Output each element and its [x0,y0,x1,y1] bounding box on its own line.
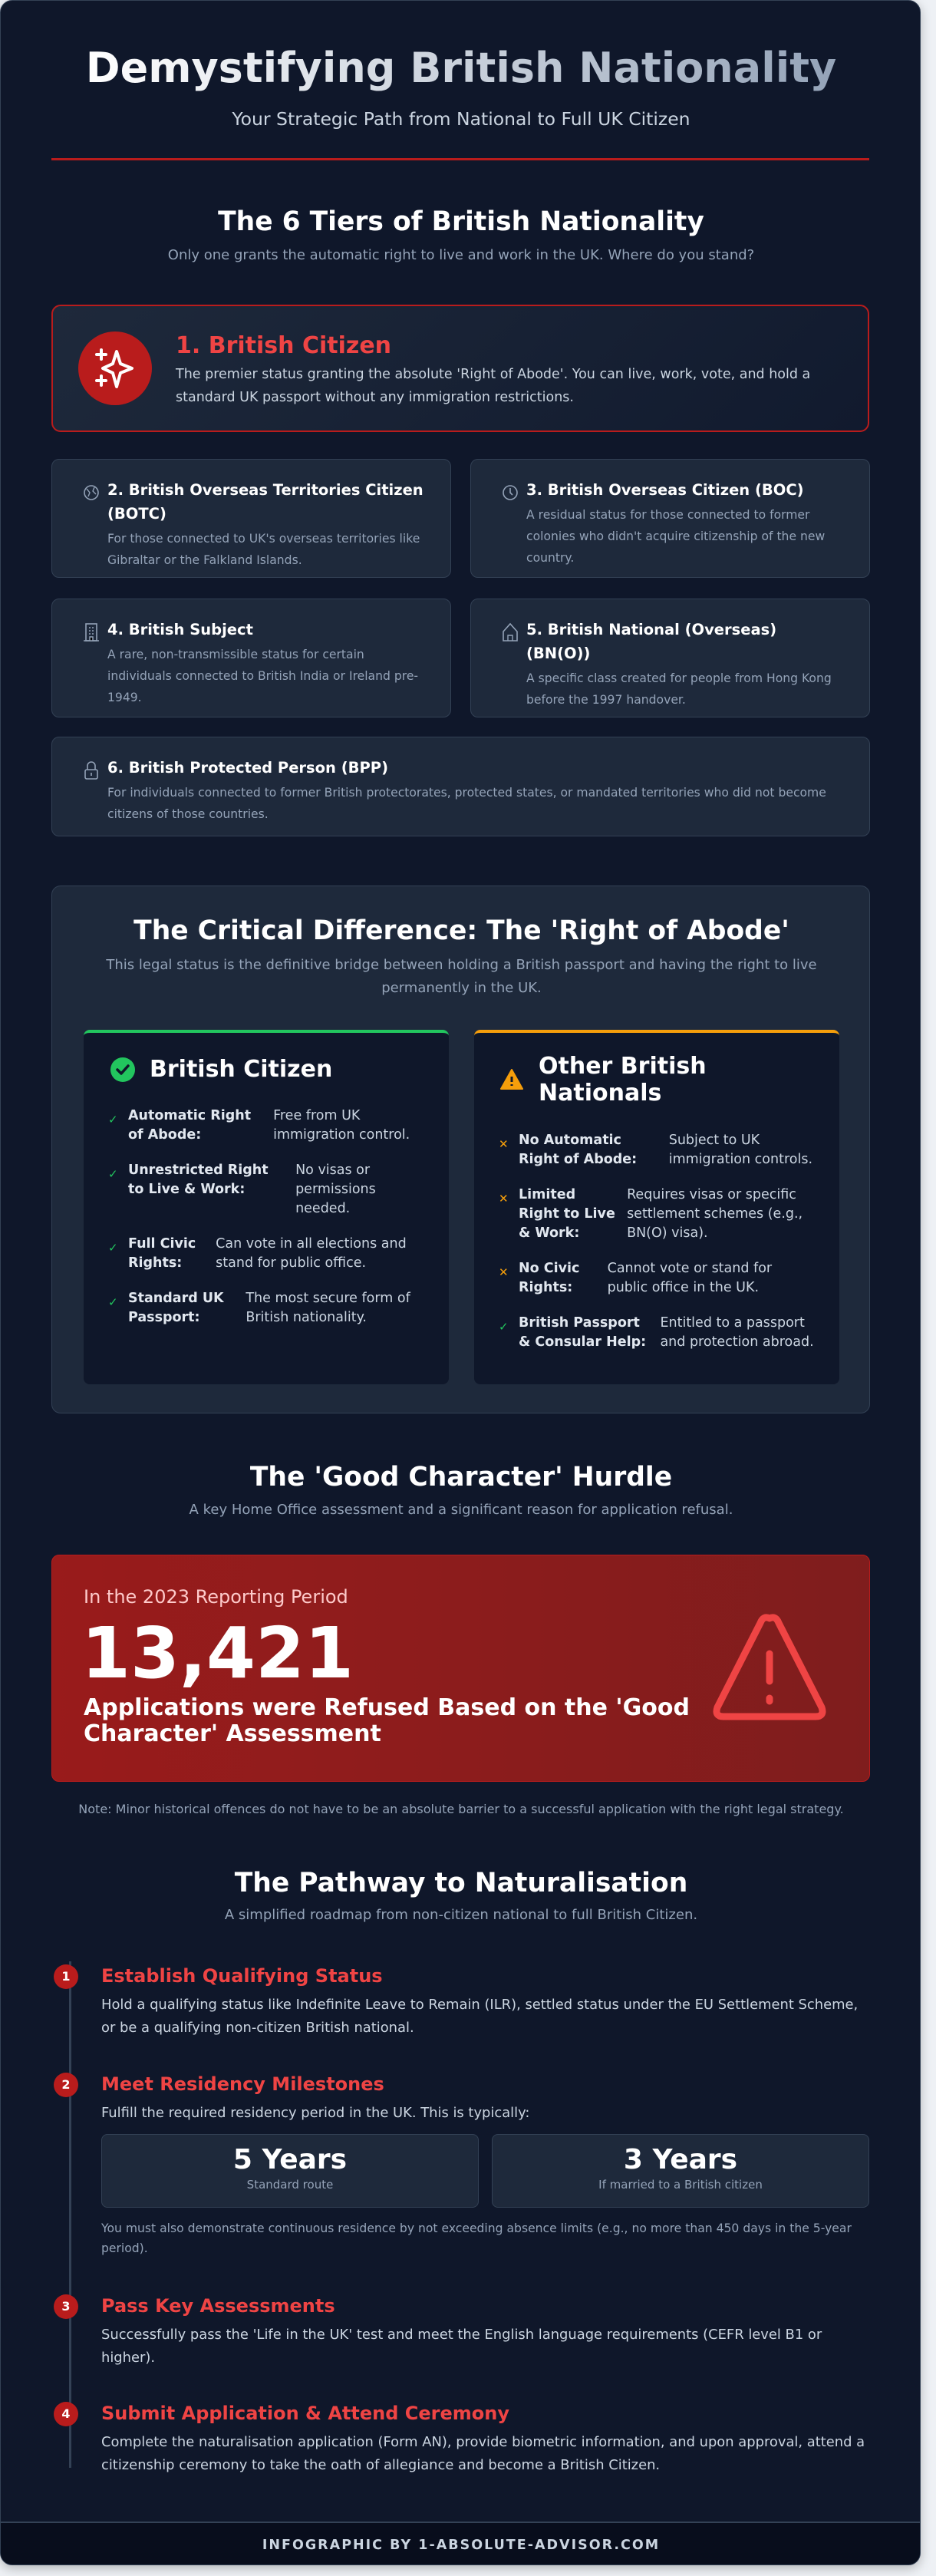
step 3: Pass Key Assessments [101,2295,335,2317]
section heading: pathway: The Pathway to Naturalisation [235,1868,687,1898]
box: 5 years: 5 Years [233,2144,347,2175]
icon: building [84,623,99,642]
step 1 [54,1964,858,2036]
step 3: Successfully pass the 'Life in the UK' test and meet the English language requirements (CEFR level B1 or higher). [101,2327,822,2366]
box: 3 years: If married to a British citizen [598,2178,763,2192]
list: citizen rights: ✓ [108,1241,118,1255]
panel: tier 6 BPP [51,737,870,836]
list: citizen rights: Full Civic Rights: [128,1236,196,1271]
header subtitle: Your Strategic Path from National to Full UK Citizen [232,108,690,130]
list: citizen rights: Automatic Right of Abode: [128,1108,251,1143]
list: citizen rights: No visas or permissions needed. [295,1163,376,1216]
list: citizen rights: ✓ [108,1167,118,1181]
heading with warning icon [500,1053,707,1107]
section heading: tiers: The 6 Tiers of British Nationality [218,206,704,237]
abode heading: The Critical Difference: The 'Right of Abode' [133,915,789,946]
panel: tier 4 British Subject [51,599,451,717]
section subtitle: good character: A key Home Office assessment and a significant reason for application refusal. [190,1502,733,1518]
list: other nationals rights [499,1133,814,1350]
list: other nationals rights: No Civic Rights: [519,1261,579,1295]
icon: house [503,623,518,642]
box: 3 years [492,2134,869,2208]
icon: clock [503,485,518,500]
icon: warning triangle [714,1614,826,1720]
list: citizen rights: The most secure form of British nationality. [246,1291,410,1325]
panel: right of abode [51,886,870,1413]
step 4: Submit Application & Attend Ceremony [101,2403,509,2424]
year boxes [101,2134,869,2208]
box: 5 years: Standard route [247,2178,333,2192]
abode subtitle: This legal status is the definitive bridge between holding a British passport and having the right to live permanently in the UK. [106,957,817,996]
list: other nationals rights: ✓ [499,1320,509,1334]
step 2: Fulfill the required residency period in the UK. This is typically: [101,2105,529,2121]
list: other nationals rights: Subject to UK immigration controls. [669,1133,812,1167]
step 2 [54,2073,869,2255]
footer: INFOGRAPHIC BY 1-ABSOLUTE-ADVISOR.COM [262,2538,660,2553]
panel: tier 6 BPP: 6. British Protected Person (BPP) [107,759,388,777]
step 4: Complete the naturalisation application (Form AN), provide biometric information, and upon approval, attend a citizenship ceremony to take the oath of allegiance and become a British Citizen. [101,2434,865,2473]
step 2: You must also demonstrate continuous residence by not exceeding absence limits (e.g., no more than 450 days in the 5-year period). [101,2221,852,2255]
panel: tier 3 BOC: 3. British Overseas Citizen (BOC) [526,481,804,499]
step 2: Meet Residency Milestones [101,2073,384,2095]
list: citizen rights: Free from UK immigration control. [273,1108,410,1143]
section subtitle: pathway: A simplified roadmap from non-citizen national to full British Citizen. [225,1907,697,1923]
panel: tier 2 BOTC: 2. British Overseas Territories Citizen (BOTC) [107,481,424,523]
callout: refusal statistic [51,1555,870,1782]
timeline: 3 [61,2299,71,2314]
tier 1 title: 1. British Citizen [176,332,391,359]
list: citizen rights: Can vote in all elections and stand for public office. [216,1236,407,1271]
timeline: 4 [61,2406,71,2421]
tier 1 description: The premier status granting the absolute 'Right of Abode'. You can live, work, vote, and hold a standard UK passport without any immigration restrictions. [176,367,810,405]
stat number: 13,421 [81,1612,354,1694]
timeline: 1 [61,1969,71,1984]
box: 3 years: 3 Years [624,2144,737,2175]
inner card: other nationals [474,1030,839,1384]
list: citizen rights: ✓ [108,1113,118,1126]
list: other nationals rights: Cannot vote or stand for public office in the UK. [608,1261,772,1295]
list: other nationals rights: British Passport & Consular Help: [519,1315,646,1350]
step 3 [54,2294,822,2366]
list: citizen rights: Standard UK Passport: [128,1291,224,1325]
heading with warning icon: Nationals [539,1080,661,1107]
list: citizen rights: Unrestricted Right to Live & Work: [128,1163,269,1197]
list: citizen rights: ✓ [108,1295,118,1309]
note: Note: Minor historical offences do not have to be an absolute barrier to a successful application with the right legal strategy. [78,1802,844,1816]
list: other nationals rights: ✕ [499,1137,509,1151]
section heading: good character: The 'Good Character' Hurdle [250,1462,672,1492]
panel: tier 3 BOC: A residual status for those connected to former colonies who didn't acquire citizenship of the new country. [526,508,825,565]
panel: tier 6 BPP: For individuals connected to former British protectorates, protected states, or mandated territories who did not become citizens of those countries. [107,786,826,821]
list: other nationals rights: Limited Right to Live & Work: [519,1187,615,1241]
list: other nationals rights: Requires visas or specific settlement schemes (e.g., BN(O) visa). [627,1187,803,1241]
panel: tier 3 BOC [470,459,870,578]
heading with check icon: British Citizen [150,1056,332,1083]
step 4 [54,2402,865,2473]
panel: tier 5 BN(O): A specific class created for people from Hong Kong before the 1997 handover. [526,671,832,707]
panel: tier 1 British Citizen [51,305,869,432]
footer [1,2522,921,2568]
stat caption: Applications were Refused Based on the 'Good Character' Assessment [84,1694,690,1747]
panel: tier 2 BOTC: For those connected to UK's overseas territories like Gibraltar or the Falkland Islands. [107,532,420,567]
panel: tier 5 BN(O) [470,599,870,717]
panel: tier 2 BOTC [51,459,451,578]
heading with warning icon: Other British [539,1053,707,1080]
section subtitle: tiers: Only one grants the automatic right to live and work in the UK. Where do you stand? [168,247,754,263]
list: other nationals rights: No Automatic Right of Abode: [519,1133,637,1167]
panel: tier 4 British Subject: A rare, non-transmissible status for certain individuals connected to British India or Ireland pre-1949. [107,648,418,704]
header title: Demystifying British Nationality [86,44,836,92]
timeline: 2 [61,2077,71,2092]
timeline [54,1961,869,2473]
list: other nationals rights: ✕ [499,1192,509,1206]
box: 5 years [101,2134,479,2208]
list: citizen rights [108,1108,411,1325]
icon: globe [84,485,99,500]
inner card: british citizen [84,1030,449,1384]
panel: tier 4 British Subject: 4. British Subject [107,621,253,638]
step 1: Hold a qualifying status like Indefinite Leave to Remain (ILR), settled status under the EU Settlement Scheme, or be a qualifying non-citizen British national. [101,1997,858,2036]
panel: tier 5 BN(O): 5. British National (Overseas) (BN(O)) [526,621,776,662]
list: other nationals rights: ✕ [499,1265,509,1279]
list: other nationals rights: Entitled to a passport and protection abroad. [660,1315,814,1350]
icon: lock [84,761,98,780]
icon: sparkle [78,331,152,405]
step 1: Establish Qualifying Status [101,1965,383,1987]
stat label: In the 2023 Reporting Period [84,1586,348,1608]
